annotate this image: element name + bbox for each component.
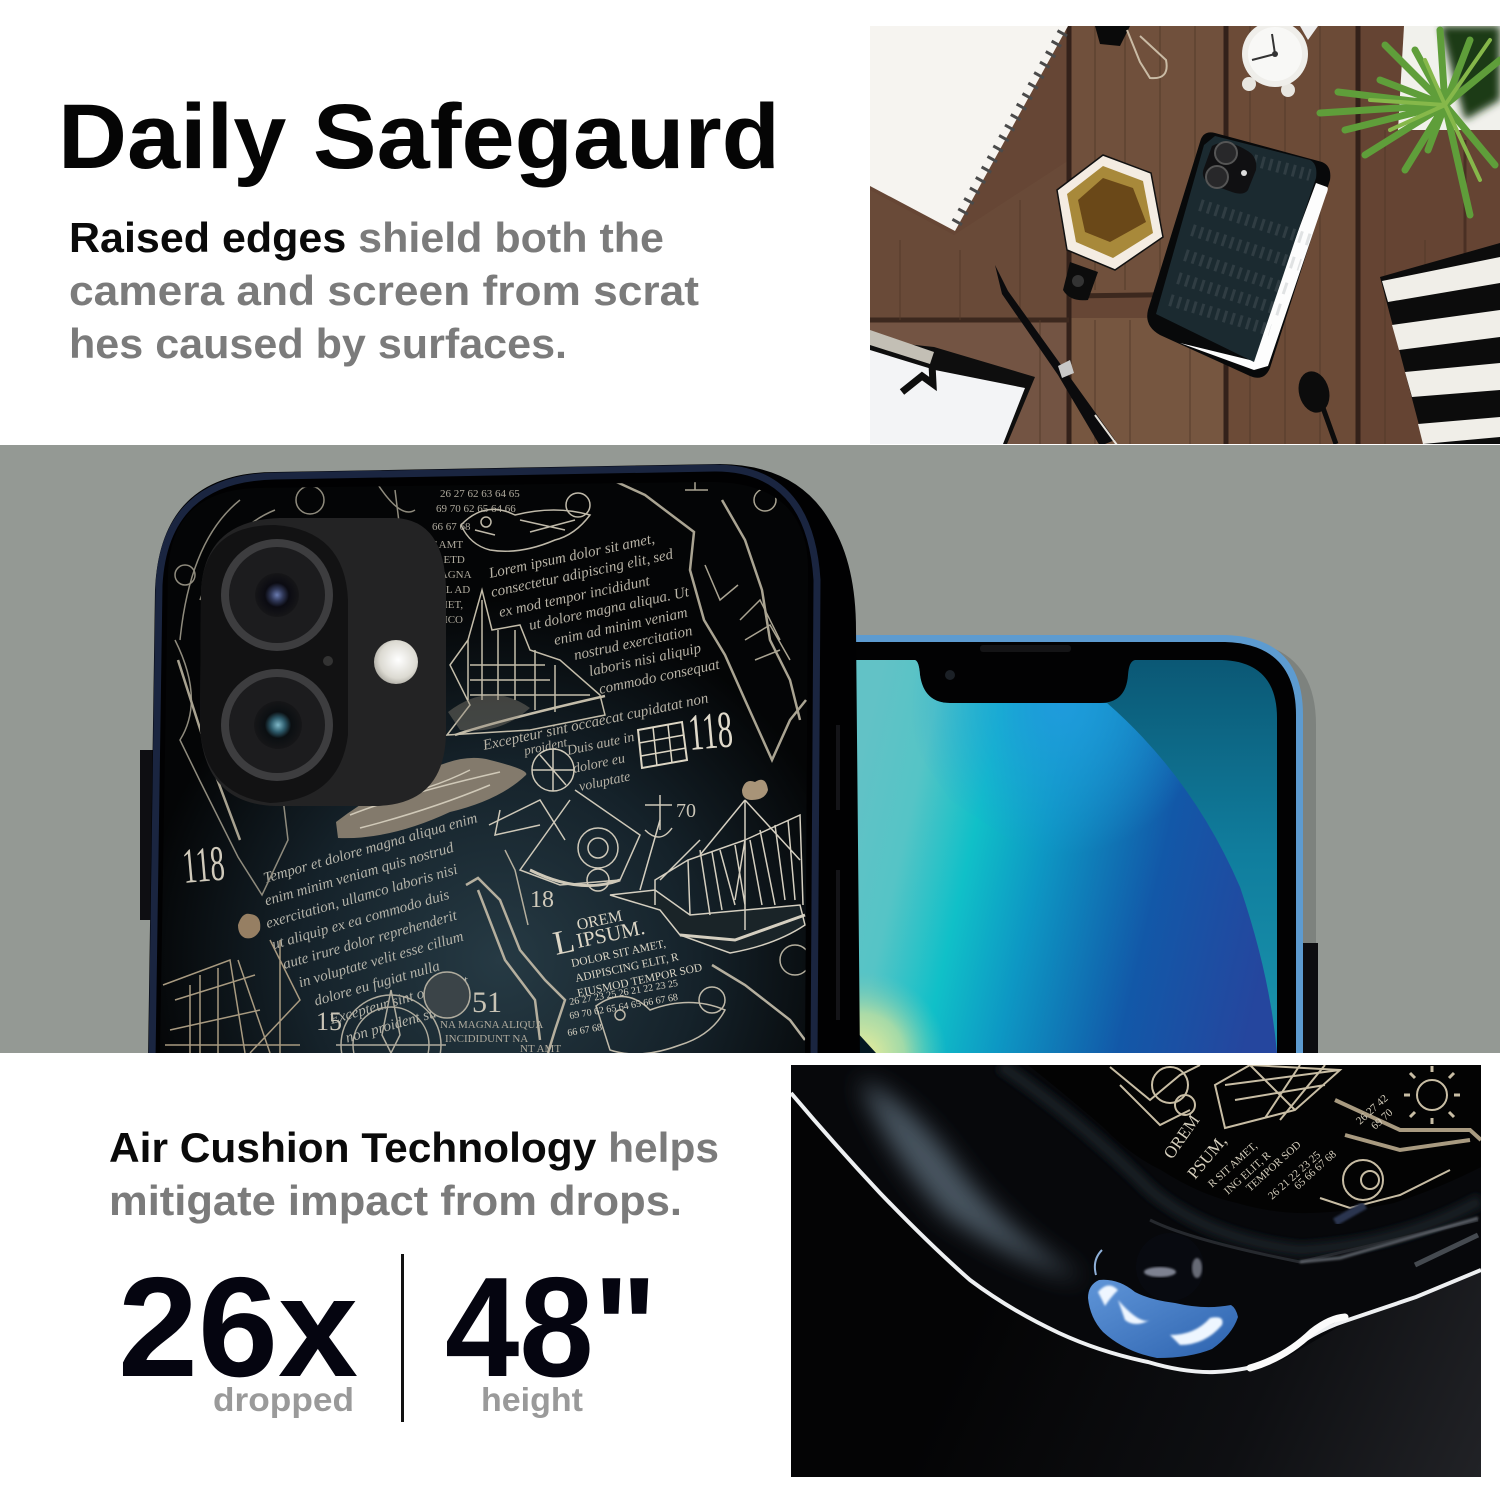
phone front: blue iPhone with gradient screen bbox=[830, 635, 1318, 1060]
handwriting lower: exercitation, ullamco laboris nisi bbox=[264, 862, 459, 932]
alarm clock bbox=[1242, 21, 1318, 97]
artwork seen through the bumper: 26 27 42 bbox=[1354, 1093, 1391, 1127]
stat: 48 inches height: 48" bbox=[445, 1248, 657, 1407]
small capitals column and numbers: U, ETD bbox=[430, 554, 465, 566]
small capitals column and numbers: AMET, bbox=[430, 599, 463, 611]
divider bbox=[401, 1254, 404, 1422]
small capitals column and numbers: INCIDIDUNT NA bbox=[445, 1033, 528, 1045]
lorem ipsum lettering: 69 70 62 65 64 65 66 67 68 bbox=[569, 992, 679, 1022]
grid and 118 numerals: 15 bbox=[316, 1007, 342, 1036]
small capitals column and numbers bbox=[430, 488, 561, 1055]
handwriting upper: Lorem ipsum dolor sit amet, bbox=[487, 531, 656, 582]
binder clip bbox=[1095, 26, 1167, 78]
second ship bbox=[163, 940, 300, 1053]
stat: 26x dropped: 26x bbox=[118, 1248, 358, 1407]
bumper seams bbox=[1150, 1220, 1478, 1262]
top right coastline bbox=[608, 470, 806, 760]
small capitals column and numbers: 66 67 68 bbox=[432, 521, 471, 533]
small capitals column and numbers: NT AMT bbox=[520, 1043, 561, 1055]
top left drawings bbox=[175, 480, 415, 895]
case artwork bbox=[161, 482, 807, 1053]
handwriting upper: proident bbox=[522, 734, 569, 758]
text block: air cushion: mitigate impact from drops. bbox=[109, 1177, 682, 1224]
grid and 118 numerals bbox=[180, 701, 735, 1036]
handwriting upper: commodo consequat bbox=[598, 657, 722, 698]
grid and 118 numerals: 70 bbox=[676, 800, 696, 822]
fish bbox=[461, 493, 725, 1054]
grid and 118 numerals: 51 bbox=[472, 986, 502, 1019]
handwriting upper: Excepteur sint occaecat cupidatat non bbox=[481, 690, 710, 754]
grid and 118 numerals: 18 bbox=[530, 887, 554, 913]
artwork seen through the bumper: 26 21 22 23 25 bbox=[1266, 1149, 1323, 1202]
small capitals column and numbers: UAL AD bbox=[430, 584, 470, 596]
lorem ipsum lettering: L bbox=[550, 922, 578, 963]
small capitals column and numbers: 26 27 62 63 64 65 bbox=[440, 488, 520, 500]
artwork seen through the bumper: 69 70 bbox=[1369, 1106, 1396, 1132]
screen bbox=[915, 660, 1277, 1053]
text block: air cushion bbox=[109, 1124, 719, 1224]
sextant bbox=[489, 749, 672, 891]
small capitals column and numbers: T AMT bbox=[430, 539, 463, 551]
stat: 48 inches height: height bbox=[481, 1381, 583, 1418]
small capitals column and numbers: AMCO bbox=[430, 614, 463, 626]
coffee cup bbox=[1057, 155, 1163, 300]
artwork seen through the bumper: TEMPOR SOD bbox=[1244, 1139, 1304, 1194]
stains bbox=[742, 780, 768, 800]
small capitals column and numbers: 69 70 62 65 64 66 bbox=[436, 503, 516, 515]
handwriting lower: non proident sunt bbox=[344, 1002, 450, 1046]
small capitals column and numbers: NA MAGNA ALIQUA bbox=[440, 1019, 543, 1031]
text block: raised edges: hes caused by surfaces. bbox=[69, 320, 567, 367]
small capitals column and numbers: MAGNA bbox=[430, 569, 472, 581]
grid and 118 numerals: 118 bbox=[180, 835, 227, 894]
lower coastline bbox=[466, 850, 810, 1053]
handwriting lower: ut aliquip ex ea commodo duis bbox=[270, 887, 451, 953]
lorem ipsum lettering bbox=[550, 908, 703, 1039]
pen bbox=[995, 265, 1117, 446]
artwork seen through the bumper: R SIT AMET, bbox=[1206, 1140, 1260, 1190]
handwriting lower: enim minim veniam quis nostrud bbox=[263, 840, 456, 909]
handwriting upper bbox=[481, 531, 722, 795]
wood planks bbox=[870, 26, 1500, 444]
artwork seen through the bumper: 65 66 67 68 bbox=[1292, 1148, 1339, 1192]
phone on desk bbox=[1147, 132, 1330, 378]
handwriting upper: consectetur adipiscing elit, sed bbox=[490, 547, 675, 601]
plant bbox=[1320, 26, 1500, 215]
bumper highlight bbox=[860, 1080, 1085, 1280]
phone case back bbox=[140, 464, 860, 1095]
water drop bbox=[1088, 1233, 1238, 1358]
lorem ipsum lettering: 66 67 68 bbox=[567, 1022, 603, 1039]
title: Daily Safegaurd bbox=[58, 86, 780, 188]
photo: case edge close-up with water drop bbox=[791, 1065, 1481, 1477]
handwriting upper: Duis aute in bbox=[565, 730, 636, 759]
main ship bbox=[610, 800, 805, 953]
lorem ipsum lettering: EIUSMOD TEMPOR SOD bbox=[576, 962, 703, 1000]
handwriting lower: in voluptate velit esse cillum bbox=[297, 929, 466, 991]
artwork seen through the bumper: ING ELIT, R bbox=[1222, 1149, 1274, 1197]
notch details bbox=[945, 670, 955, 680]
spoon bbox=[1294, 368, 1336, 444]
cloud bbox=[336, 758, 526, 838]
handwriting lower: aute irure dolor reprehenderit bbox=[281, 908, 460, 973]
text block: raised edges bbox=[69, 214, 699, 367]
lorem ipsum lettering: OREM bbox=[575, 908, 624, 934]
handwriting upper: laboris nisi aliquip bbox=[588, 640, 703, 680]
white rim line bbox=[791, 1093, 1481, 1372]
artwork seen through the bumper bbox=[1020, 1065, 1481, 1225]
bumper body above the white rim bbox=[1282, 1167, 1481, 1360]
photo: desk flat lay with phone bbox=[870, 21, 1500, 446]
lorem ipsum lettering: IPSUM. bbox=[574, 915, 647, 953]
text block: air cushion: Air Cushion Technology helps bbox=[109, 1124, 719, 1171]
moon and compass bbox=[336, 971, 471, 1053]
grid and 118 numerals: 118 bbox=[686, 701, 735, 762]
artwork seen through the bumper: PSUM, bbox=[1184, 1132, 1231, 1183]
gray band bbox=[0, 445, 1500, 1053]
handwriting lower: Excepteur sint occaecat bbox=[327, 973, 471, 1028]
camera island bbox=[200, 518, 446, 806]
handwriting lower bbox=[264, 816, 478, 1042]
lorem ipsum lettering: 26 27 23 25 26 21 22 23 25 bbox=[569, 978, 679, 1008]
castle bbox=[447, 590, 605, 735]
handwriting lower: dolore eu fugiat nulla bbox=[312, 958, 442, 1010]
handwriting upper: ut dolore magna aliqua. Ut bbox=[528, 584, 691, 634]
handwriting upper: dolore eu bbox=[572, 751, 626, 777]
text block: raised edges: camera and screen from scrat bbox=[69, 267, 699, 314]
lorem ipsum lettering: DOLOR SIT AMET, bbox=[570, 938, 667, 970]
small capitals column and numbers: OR bbox=[430, 629, 446, 641]
handwriting lower: Tempor et dolore magna aliqua enim bbox=[262, 810, 479, 887]
handwriting upper: voluptate bbox=[578, 769, 632, 795]
handwriting upper: ex mod tempor incididunt bbox=[498, 573, 652, 621]
notebook bbox=[870, 26, 1068, 231]
clipboard bbox=[870, 330, 1035, 444]
lorem ipsum lettering: ADIPISCING ELIT, R bbox=[574, 951, 680, 985]
striped notebook bbox=[1380, 243, 1500, 444]
text block: raised edges: Raised edges shield both the bbox=[69, 214, 664, 261]
artwork seen through the bumper: OREM bbox=[1160, 1111, 1203, 1162]
stat: 26x dropped: dropped bbox=[213, 1381, 354, 1418]
handwriting upper: enim ad minim veniam bbox=[553, 605, 689, 649]
handwriting upper: nostrud exercitation bbox=[573, 623, 694, 664]
